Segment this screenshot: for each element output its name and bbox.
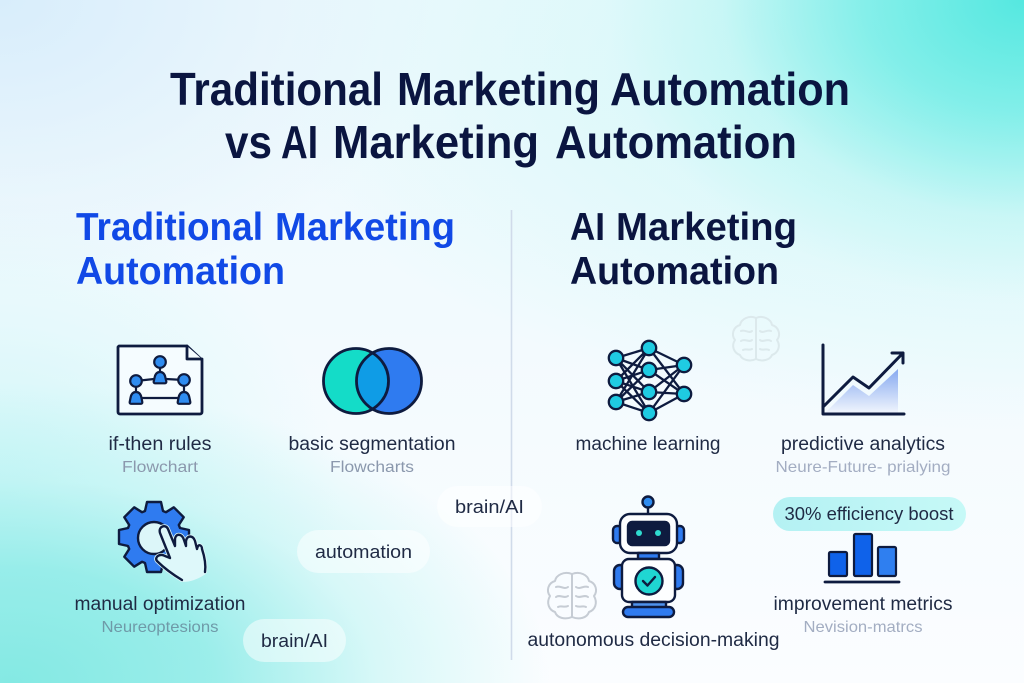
item: basic segmentation — [288, 348, 456, 476]
label: manual optimization — [74, 594, 246, 615]
title: AI — [281, 116, 318, 168]
label: machine learning — [576, 434, 720, 455]
caption: Flowcharts — [330, 459, 414, 476]
divider — [510, 210, 512, 660]
heading: ai marketing automation: Automation — [570, 250, 779, 293]
heading: ai marketing automation: Marketing — [616, 206, 797, 249]
icon: growth chart — [823, 345, 904, 414]
pill: brain/AI lower: brain/AI — [261, 630, 328, 651]
title: Marketing — [397, 63, 600, 115]
title: Automation — [555, 116, 797, 168]
title: Automation — [610, 63, 850, 115]
label: autonomous decision-making — [528, 630, 780, 651]
icon: faint brain lower — [548, 573, 596, 618]
item: autonomous decision-making — [528, 496, 780, 651]
pill: brain/AI upper — [437, 486, 542, 527]
icon: venn diagram — [324, 348, 422, 414]
label: if-then rules — [108, 434, 212, 455]
title — [170, 63, 850, 168]
item: predictive analytics — [776, 345, 950, 476]
callout: 30% efficiency boost: 30% efficiency boost — [784, 503, 954, 524]
icon: robot — [613, 496, 684, 617]
icon: bar chart — [825, 534, 899, 582]
icon: faint brain upper — [733, 317, 779, 360]
heading: traditional marketing automation: Marketing — [275, 206, 455, 249]
label: basic segmentation — [288, 434, 456, 455]
title: vs — [225, 116, 272, 168]
title: Marketing — [333, 116, 539, 168]
item: improvement metrics — [773, 497, 966, 636]
title: Traditional — [170, 63, 383, 115]
heading: ai marketing automation — [570, 206, 797, 293]
caption: Nevision-matrcs — [804, 619, 922, 636]
icon: gear with hand — [119, 502, 205, 580]
heading: ai marketing automation: AI — [570, 206, 605, 249]
caption: Neureoptesions — [102, 619, 218, 636]
pill: automation: automation — [315, 541, 412, 562]
callout: 30% efficiency boost — [773, 497, 966, 531]
heading: traditional marketing automation: Traditional — [76, 206, 263, 249]
label: improvement metrics — [774, 594, 952, 615]
caption: Neure-Future- prialying — [776, 459, 950, 476]
icon: flowchart document — [118, 346, 202, 414]
pill: brain/AI upper: brain/AI — [455, 496, 524, 517]
item: if-then rules — [108, 346, 212, 476]
item: machine learning — [576, 341, 720, 455]
pill: brain/AI lower — [243, 619, 346, 662]
label: predictive analytics — [781, 434, 945, 455]
item: manual optimization — [74, 502, 246, 636]
pill: automation — [297, 530, 430, 573]
caption: Flowchart — [122, 459, 199, 476]
heading: traditional marketing automation — [76, 206, 455, 293]
icon: neural network — [609, 341, 691, 420]
heading: traditional marketing automation: Automation — [76, 250, 285, 293]
